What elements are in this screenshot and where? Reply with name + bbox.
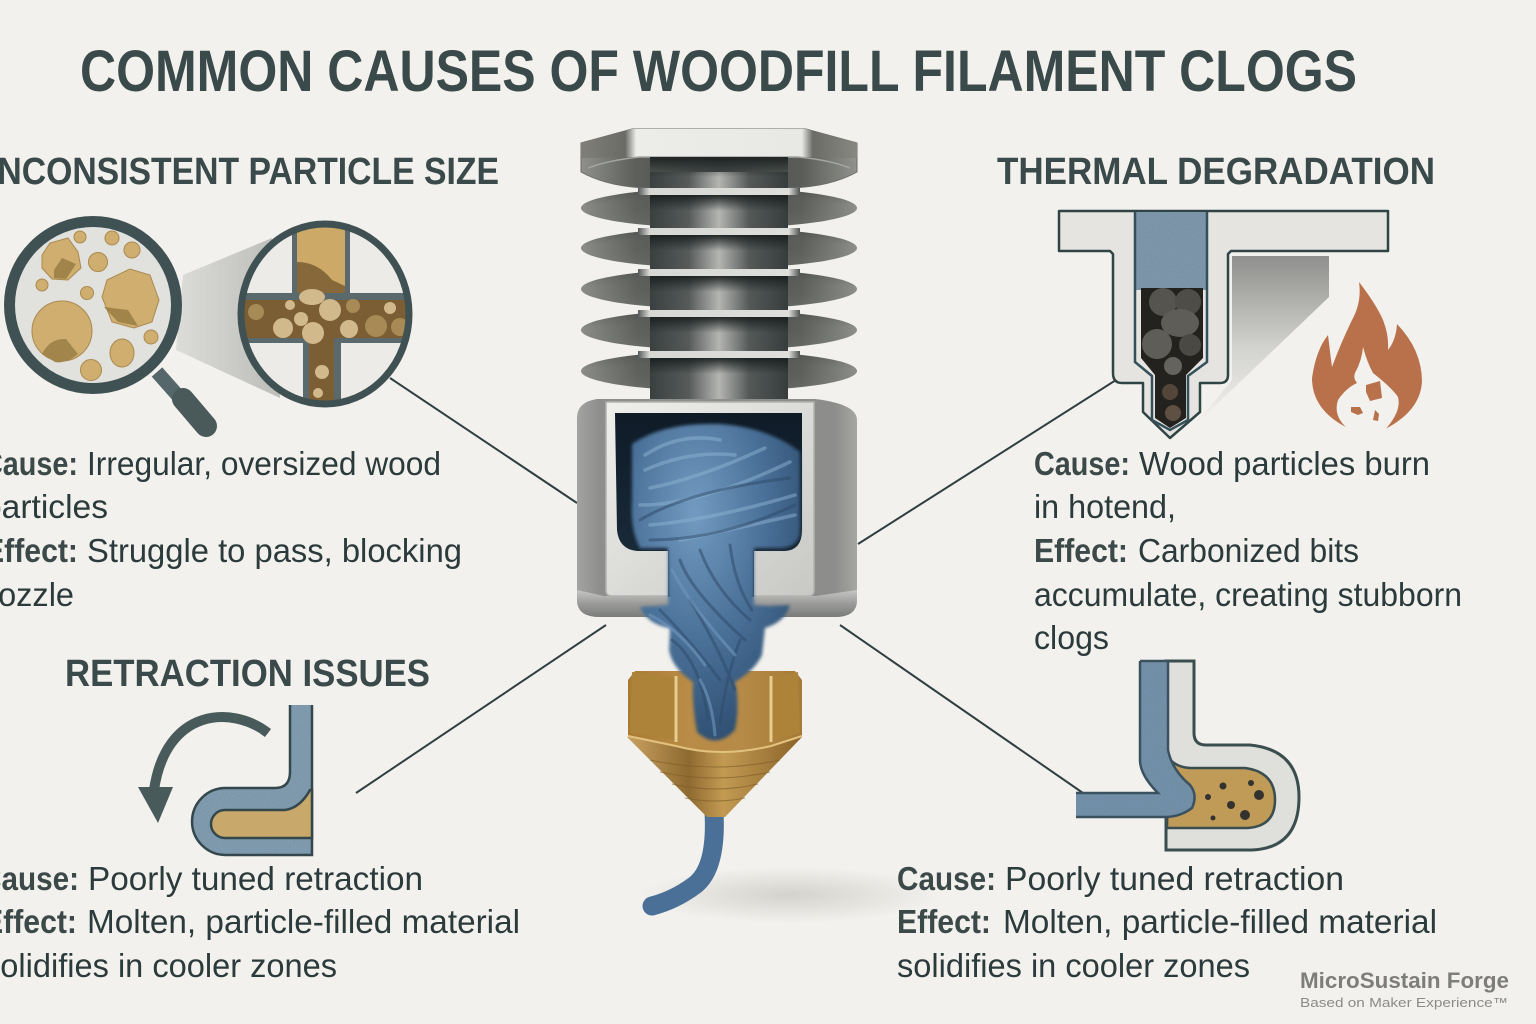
text block: particle size cause and effect: Struggle to pass, blocking (87, 532, 462, 569)
panel: retraction issues (0, 653, 520, 984)
text block: cooler zone cause and effect: Molten, particle-filled material (1003, 903, 1437, 940)
panel: thermal degradation (997, 151, 1462, 656)
text block: cooler zone cause and effect (897, 860, 1437, 984)
title: COMMON CAUSES OF WOODFILL FILAMENT CLOGS (80, 39, 1357, 104)
watermark: Based on Maker Experience™ (1300, 995, 1508, 1010)
text block: cooler zone cause and effect: Cause: (897, 860, 996, 897)
icon: retraction tube cross-section (192, 705, 312, 855)
icon: cross-section of clogged channel (238, 220, 412, 408)
icon: retraction arrow (138, 717, 268, 823)
text block: thermal degradation cause and effect: in hotend, (1034, 488, 1176, 525)
watermark: MicroSustain Forge (1300, 968, 1509, 993)
text block: retraction cause and effect: Poorly tuned retraction (88, 860, 423, 897)
icon: bent tube cross-section with solidified material (1076, 661, 1299, 850)
brass nozzle (627, 671, 802, 817)
text block: thermal degradation cause and effect: Effect: (1034, 532, 1128, 569)
text block: thermal degradation cause and effect: Carbonized bits (1138, 532, 1359, 569)
text block: cooler zone cause and effect: solidifies in cooler zones (897, 947, 1250, 984)
text block: retraction cause and effect (0, 860, 520, 984)
text block: particle size cause and effect (0, 445, 462, 613)
text block: thermal degradation cause and effect: Wood particles burn (1139, 445, 1430, 482)
panel: inconsistent particle size (0, 151, 499, 613)
cast shadow (1195, 256, 1329, 425)
icon: magnifying glass with wood particles (10, 222, 206, 426)
leader line: thermal degradation to heat block (858, 380, 1116, 544)
leader line: particle size to heat block (390, 378, 577, 503)
leader line: cooler zone to heat block (840, 625, 1083, 793)
heading: retraction issues: RETRACTION ISSUES (65, 653, 430, 695)
heater block with cutaway (577, 399, 857, 617)
panel: cooler zone solidification (897, 661, 1437, 984)
watermark (1300, 968, 1509, 1010)
leader line: retraction to heat block (356, 625, 606, 793)
heading: thermal degradation: THERMAL DEGRADATION (997, 151, 1435, 193)
filament clog (632, 424, 800, 741)
text block: retraction cause and effect: Molten, particle-filled material (87, 903, 520, 940)
text block: cooler zone cause and effect: Effect: (897, 903, 991, 940)
text block: thermal degradation cause and effect: accumulate, creating stubborn (1034, 576, 1462, 613)
text block: cooler zone cause and effect: Poorly tuned retraction (1005, 860, 1344, 897)
cavity (615, 413, 802, 597)
nozzle cross-section with carbonized bits (1059, 211, 1388, 438)
tail of extruded filament (652, 812, 714, 906)
heading: inconsistent particle size: INCONSISTENT PARTICLE SIZE (0, 151, 499, 193)
panel: hotend illustration (577, 129, 940, 923)
text block: thermal degradation cause and effect: clogs (1034, 619, 1109, 656)
heat sink with fins (581, 129, 857, 405)
text block: particle size cause and effect: Irregular, oversized wood (87, 445, 441, 482)
text block: thermal degradation cause and effect (1034, 445, 1462, 656)
icon: flame (1312, 282, 1422, 432)
text block: thermal degradation cause and effect: Cause: (1034, 445, 1130, 482)
zoom beam between magnifier and cross-section (176, 238, 280, 398)
drop shadow under filament (640, 867, 940, 923)
